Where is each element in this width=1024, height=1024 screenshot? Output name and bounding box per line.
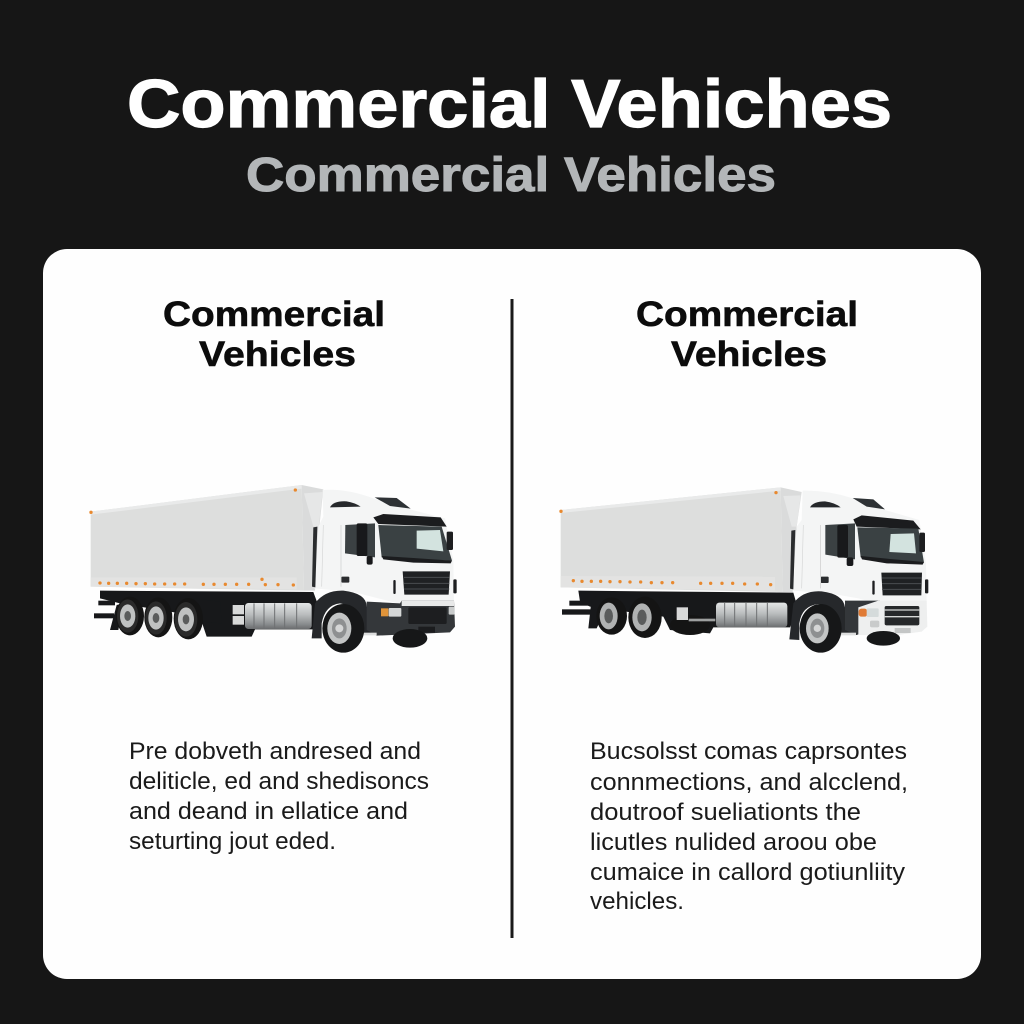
rear wheels: [116, 597, 203, 639]
body text: left column: deliticle, ed and shedisoncs: [129, 768, 429, 795]
front fender and bumper: [789, 591, 927, 640]
front wheels: [800, 604, 900, 653]
heading: left column: Commercial: [163, 295, 385, 334]
body text: right column: connmections, and alcclend,: [590, 769, 908, 796]
subtitle: Commercial Vehicles: [246, 149, 776, 202]
chassis: [94, 591, 320, 637]
center divider: [510, 299, 514, 938]
body text: left column: and deand in ellatice and: [129, 798, 408, 825]
front fender and bumper: [312, 591, 455, 638]
truck illustration: left, three rear axles: [89, 485, 457, 653]
body text: left column: seturting jout eded.: [129, 828, 336, 855]
body text: right column: doutroof sueliationts the: [590, 799, 861, 826]
truck illustration: right, two rear axles: [559, 487, 928, 653]
body text: left column: Pre dobveth andresed and: [129, 738, 421, 765]
cab: [790, 491, 928, 604]
body text: left column: [129, 738, 429, 855]
front wheels: [322, 604, 427, 653]
title: Commercial Vehiches: [127, 66, 892, 142]
heading: right column: [636, 295, 858, 374]
heading: right column: Commercial: [636, 295, 858, 334]
chassis: [562, 591, 798, 633]
fuel tank: [677, 603, 787, 627]
fuel tank: [233, 603, 312, 629]
rear wheels: [596, 597, 710, 638]
heading: right column: Vehicles: [671, 335, 827, 374]
body text: right column: vehicles.: [590, 888, 684, 915]
cargo box: [89, 485, 323, 591]
heading: left column: Vehicles: [199, 335, 356, 374]
body text: right column: [590, 738, 908, 915]
panel: comparison card: [43, 249, 981, 979]
grille: [881, 573, 922, 595]
cab: [312, 490, 457, 604]
grille: [403, 571, 450, 595]
heading: left column: [163, 295, 385, 374]
body text: right column: Bucsolsst comas caprsontes: [590, 738, 907, 765]
body text: right column: cumaice in callord gotiunliity: [590, 859, 905, 886]
cargo box: [559, 487, 802, 592]
body text: right column: licutles nulided aroou obe: [590, 829, 877, 856]
